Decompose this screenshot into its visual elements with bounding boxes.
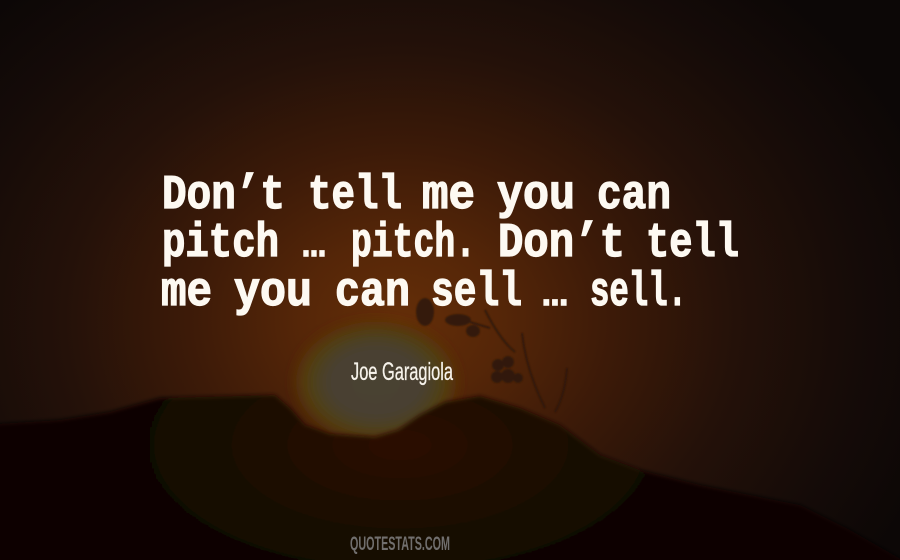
line 3: can [335, 266, 410, 320]
line 1 [162, 169, 671, 223]
line 3: you [234, 266, 312, 320]
line 1: me [422, 169, 475, 223]
setting sun [296, 322, 456, 442]
line 2: pitch. [351, 217, 476, 271]
leaves [416, 298, 434, 326]
hill silhouette [0, 395, 900, 560]
line 2: tell [646, 217, 739, 271]
line 3: sell [431, 266, 522, 320]
site credit: QUOTESTATS.COM [350, 534, 450, 555]
line 1: can [597, 169, 671, 223]
author name: Joe Garagiola [351, 358, 453, 386]
line 2 [162, 217, 739, 271]
quote text [161, 169, 739, 320]
line 3: sell. [590, 266, 687, 320]
line 2: ... [302, 226, 326, 264]
line 3: ... [542, 275, 568, 313]
line 1: you [497, 169, 575, 223]
line 2: pitch [162, 217, 279, 271]
flower cluster [492, 359, 504, 371]
line 2: Don’t [498, 217, 625, 271]
line 1: Don’t [162, 169, 285, 223]
line 3: me [161, 266, 212, 320]
stems [470, 310, 567, 412]
line 1: tell [308, 169, 402, 223]
plant silhouette [416, 298, 567, 412]
line 3 [161, 266, 687, 320]
